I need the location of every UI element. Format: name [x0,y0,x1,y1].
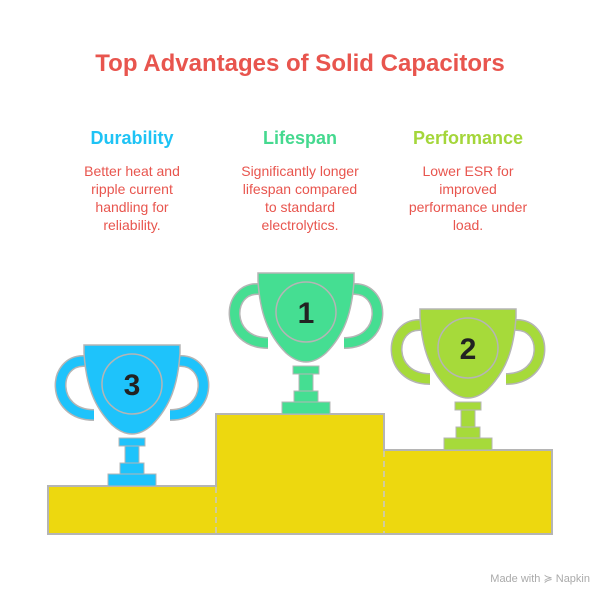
text: durability description: ripple current [91,181,173,197]
text: lifespan description: to standard [265,199,335,215]
text: lifespan description: lifespan compared [243,181,357,197]
title: Top Advantages of Solid Capacitors [95,50,505,77]
trophy 3: durability: 3 [124,369,140,402]
column: durability [84,128,180,233]
text: lifespan description: Significantly longer [241,163,359,179]
watermark: Made with ≽ Napkin [490,573,590,585]
trophy 1: lifespan [235,273,377,414]
text: performance description: Lower ESR for [422,163,514,179]
trophy 2: performance: 2 [460,333,476,366]
text: durability description: Better heat and [84,163,180,179]
podium [48,414,552,534]
text: performance description: load. [453,217,483,233]
heading: performance: Performance [413,128,523,148]
text: durability description: handling for [95,199,169,215]
trophy 3: durability [61,345,203,486]
heading: lifespan: Lifespan [263,128,337,148]
trophy 1: lifespan: 1 [298,297,314,330]
text: lifespan description: electrolytics. [261,217,339,233]
trophy 2: performance [397,309,539,450]
heading: durability: Durability [90,128,174,148]
column: lifespan [241,128,359,233]
column: performance [409,128,527,233]
text: performance description: performance under [409,199,527,215]
text: performance description: improved [439,181,497,197]
text: durability description: reliability. [103,217,161,233]
